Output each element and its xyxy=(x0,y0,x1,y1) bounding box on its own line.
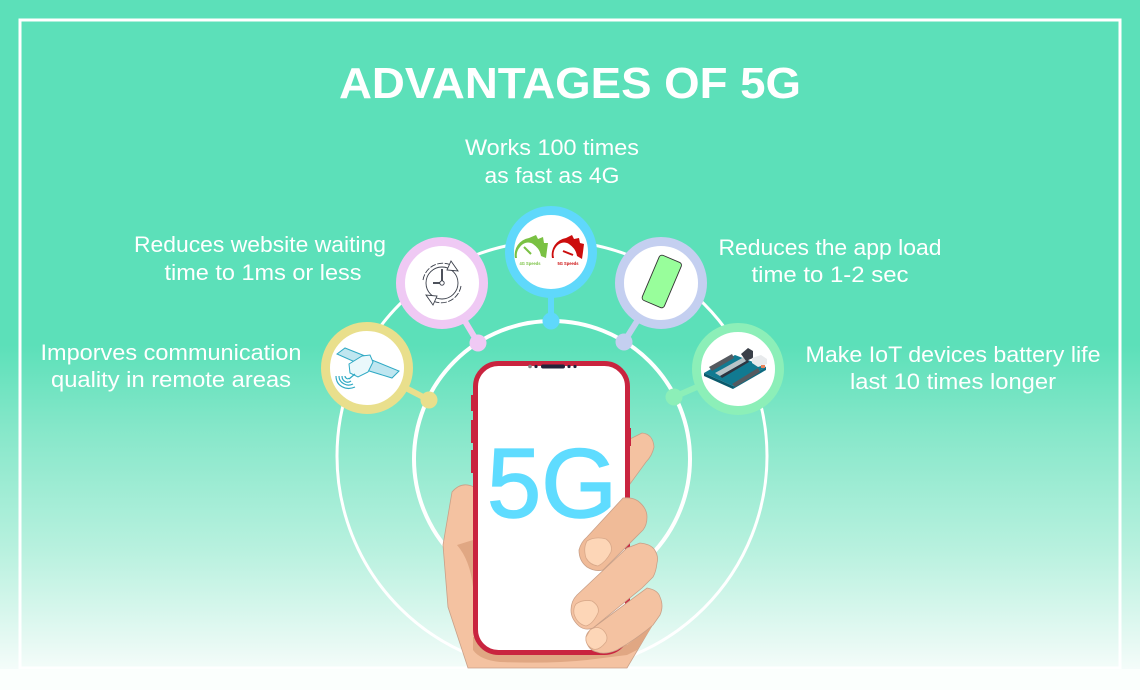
text: improves communication: quality in remote areas xyxy=(51,367,291,392)
text: reduces website waiting xyxy=(134,232,386,285)
text: improves communication: Imporves communication xyxy=(40,340,302,365)
hand: back of palm xyxy=(443,485,660,668)
inner ring xyxy=(414,321,690,597)
title: ADVANTAGES OF 5G xyxy=(339,59,801,108)
text: reduces the app load xyxy=(718,235,942,287)
text: works 100 times: Works 100 times xyxy=(465,135,639,160)
bubble: satellite xyxy=(326,326,438,410)
icon: 4G gauge: 4G Speeds xyxy=(520,261,541,266)
hand: top fingertip xyxy=(628,433,654,484)
text: reduces the app load: time to 1-2 sec xyxy=(752,262,908,287)
text: iot battery: Make IoT devices battery life xyxy=(806,342,1100,367)
phone xyxy=(471,364,631,652)
text: works 100 times xyxy=(465,135,639,188)
text: works 100 times: as fast as 4G xyxy=(484,163,620,188)
bubble: clock xyxy=(400,242,486,352)
phone notch xyxy=(528,364,577,368)
outer ring xyxy=(337,241,767,671)
bottom white band xyxy=(0,669,1140,690)
text: reduces website waiting: Reduces website waiting xyxy=(134,232,386,257)
phone label 5G: 5G xyxy=(487,428,617,538)
icon: small phone xyxy=(641,254,682,309)
icon: arduino board xyxy=(704,348,767,389)
hand: finger three xyxy=(586,588,662,653)
bubble: phone xyxy=(616,242,702,350)
hand: palm shadow xyxy=(473,625,653,663)
text: reduces the app load: Reduces the app load xyxy=(718,235,942,260)
hand: finger one xyxy=(579,498,647,571)
text: reduces website waiting: time to 1ms or less xyxy=(164,260,362,285)
bubble: speedometers xyxy=(510,210,592,330)
icon: 5G gauge: 5G Speeds xyxy=(558,261,579,266)
text: improves communication xyxy=(40,340,302,392)
icon: clock xyxy=(423,261,461,305)
hand: finger two xyxy=(571,543,658,629)
icon: satellite xyxy=(336,348,399,388)
text: iot battery xyxy=(806,342,1100,394)
bubble: arduino xyxy=(666,328,780,410)
text: iot battery: last 10 times longer xyxy=(850,369,1056,394)
